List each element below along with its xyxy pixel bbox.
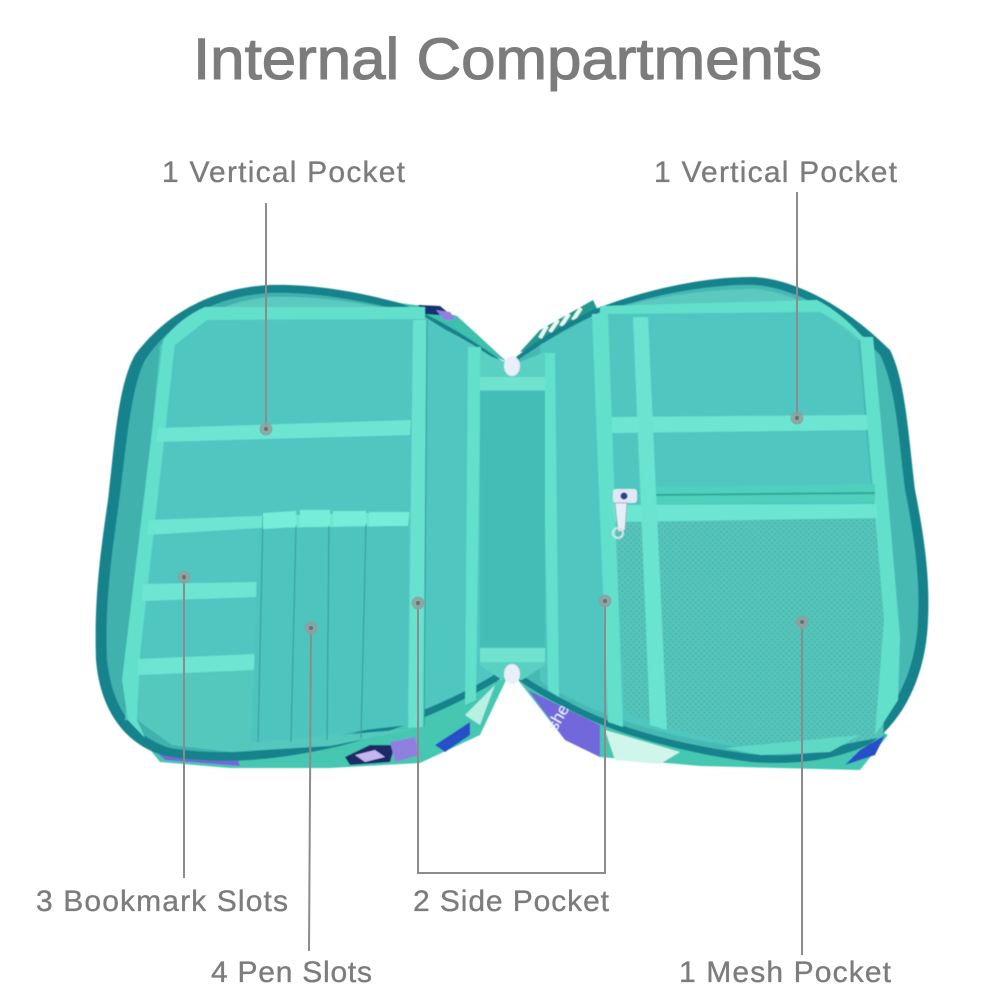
bottom zipper stop [504,664,520,684]
callout: bookmark slots [36,570,288,918]
title: Internal Compartments [193,27,822,92]
right inner panel [540,310,885,750]
fabric print: top left [400,303,507,362]
ribbon: second pocket [147,512,410,535]
spine [480,352,545,680]
callout: left vertical pocket: 1 Vertical Pocket [162,156,406,189]
pen slots [252,510,408,743]
top zipper stop [504,356,520,376]
ribbon: right edge [860,337,900,735]
ribbon: top edge [163,307,425,345]
ribbon: top edge [600,300,873,342]
ribbon: bookmark slot 2 [138,654,255,675]
left inner panel [125,317,505,748]
ribbon: left edge [122,340,175,738]
mesh pocket [615,518,888,745]
ribbon: center vertical [408,320,427,728]
callout: mesh pocket: 1 Mesh Pocket [679,956,892,989]
ribbon: spine side [542,353,559,697]
callout: pen slots [211,622,372,989]
ribbon: left side pocket edge [465,347,481,705]
right cover ribbons [542,300,900,755]
right cover side wall [515,285,918,755]
right cover outer zipper edge [510,277,928,763]
left cover lining top strip [160,297,505,400]
fabric print: top right [520,300,600,352]
right lining top strip [540,289,860,345]
ribbon: vertical 2 [633,317,667,730]
callout: side pockets: 2 Side Pocket [413,885,610,918]
callout: right vertical pocket: 1 Vertical Pocket [654,156,898,189]
callout: left vertical pocket [162,156,406,436]
callout: side pockets [412,594,612,918]
zipper pull [613,489,637,538]
left cover ribbons [122,307,481,738]
ribbon: vertical pocket seam [156,420,411,442]
callout: mesh pocket [679,616,892,989]
dark seam [424,320,427,727]
fabric print lettering: she [543,701,573,734]
zipper tape [653,484,875,504]
callout: bookmark slots: 3 Bookmark Slots [36,885,288,918]
ribbon: zipper binding [612,504,878,522]
ribbon: vertical 1 [592,314,623,727]
callout: right vertical pocket [654,156,898,424]
ribbon: horizontal pocket seam [612,415,870,433]
left lining bottom fold [138,670,420,752]
zipper teeth [653,493,875,495]
callout: pen slots: 4 Pen Slots [211,956,372,989]
fabric print: bottom right [518,680,888,770]
organizer illustration [96,277,928,770]
fabric print: bottom left [130,678,507,768]
left cover side wall [107,293,505,752]
left cover outer zipper edge [96,285,512,761]
ribbon: bottom [725,735,860,755]
ribbon: bookmark slot 1 [142,582,257,601]
